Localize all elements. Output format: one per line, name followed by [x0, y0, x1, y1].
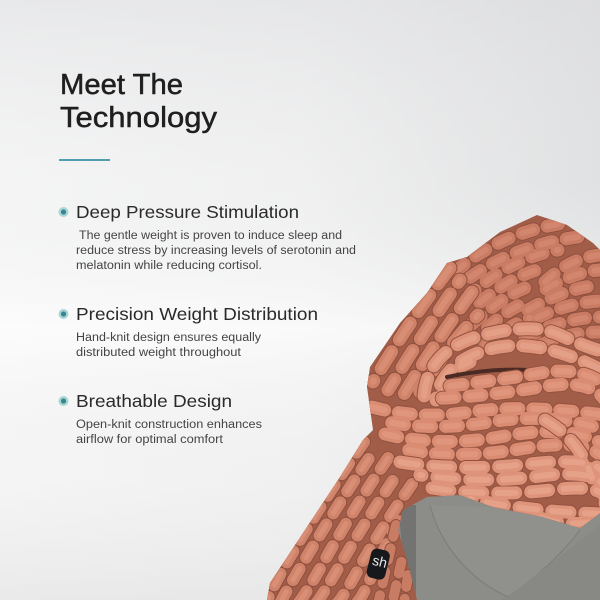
body text [76, 230, 356, 272]
body text [76, 419, 262, 446]
heading: Deep Pressure Stimulation [76, 202, 299, 222]
hanging band [266, 442, 412, 600]
upper fold [455, 222, 600, 350]
fold gap [447, 370, 528, 377]
feature: deep pressure stimulation [58, 202, 356, 272]
body text: Hand-knit design ensures equally [76, 332, 261, 344]
body text: melatonin while reducing cortisol. [76, 260, 262, 272]
edge stitches [378, 525, 408, 600]
fold band [424, 329, 600, 400]
concrete bust [398, 495, 600, 600]
body text: Open-knit construction enhances [76, 419, 262, 431]
body text [76, 332, 261, 359]
heading: Precision Weight Distribution [76, 304, 318, 324]
title: Meet The [60, 69, 183, 101]
feature: precision weight distribution [58, 304, 318, 359]
body text: airflow for optimal comfort [76, 434, 224, 446]
front rows [400, 420, 600, 524]
icon: bullet [58, 207, 68, 217]
icon: bullet [58, 396, 68, 406]
title: Technology [60, 102, 218, 134]
blanket tag [365, 547, 391, 581]
icon: bullet [58, 309, 68, 319]
blanket tag: sh [371, 552, 389, 571]
heading: Breathable Design [76, 391, 232, 411]
title [60, 69, 218, 134]
left vertical band [373, 268, 478, 394]
body text: reduce stress by increasing levels of serotonin and [76, 245, 356, 257]
body text: The gentle weight is proven to induce sleep and [79, 230, 342, 242]
title divider [59, 159, 110, 161]
knitted blanket [260, 205, 600, 600]
feature: breathable design [58, 391, 262, 446]
body text: distributed weight throughout [76, 347, 242, 359]
middle rows [372, 371, 600, 460]
